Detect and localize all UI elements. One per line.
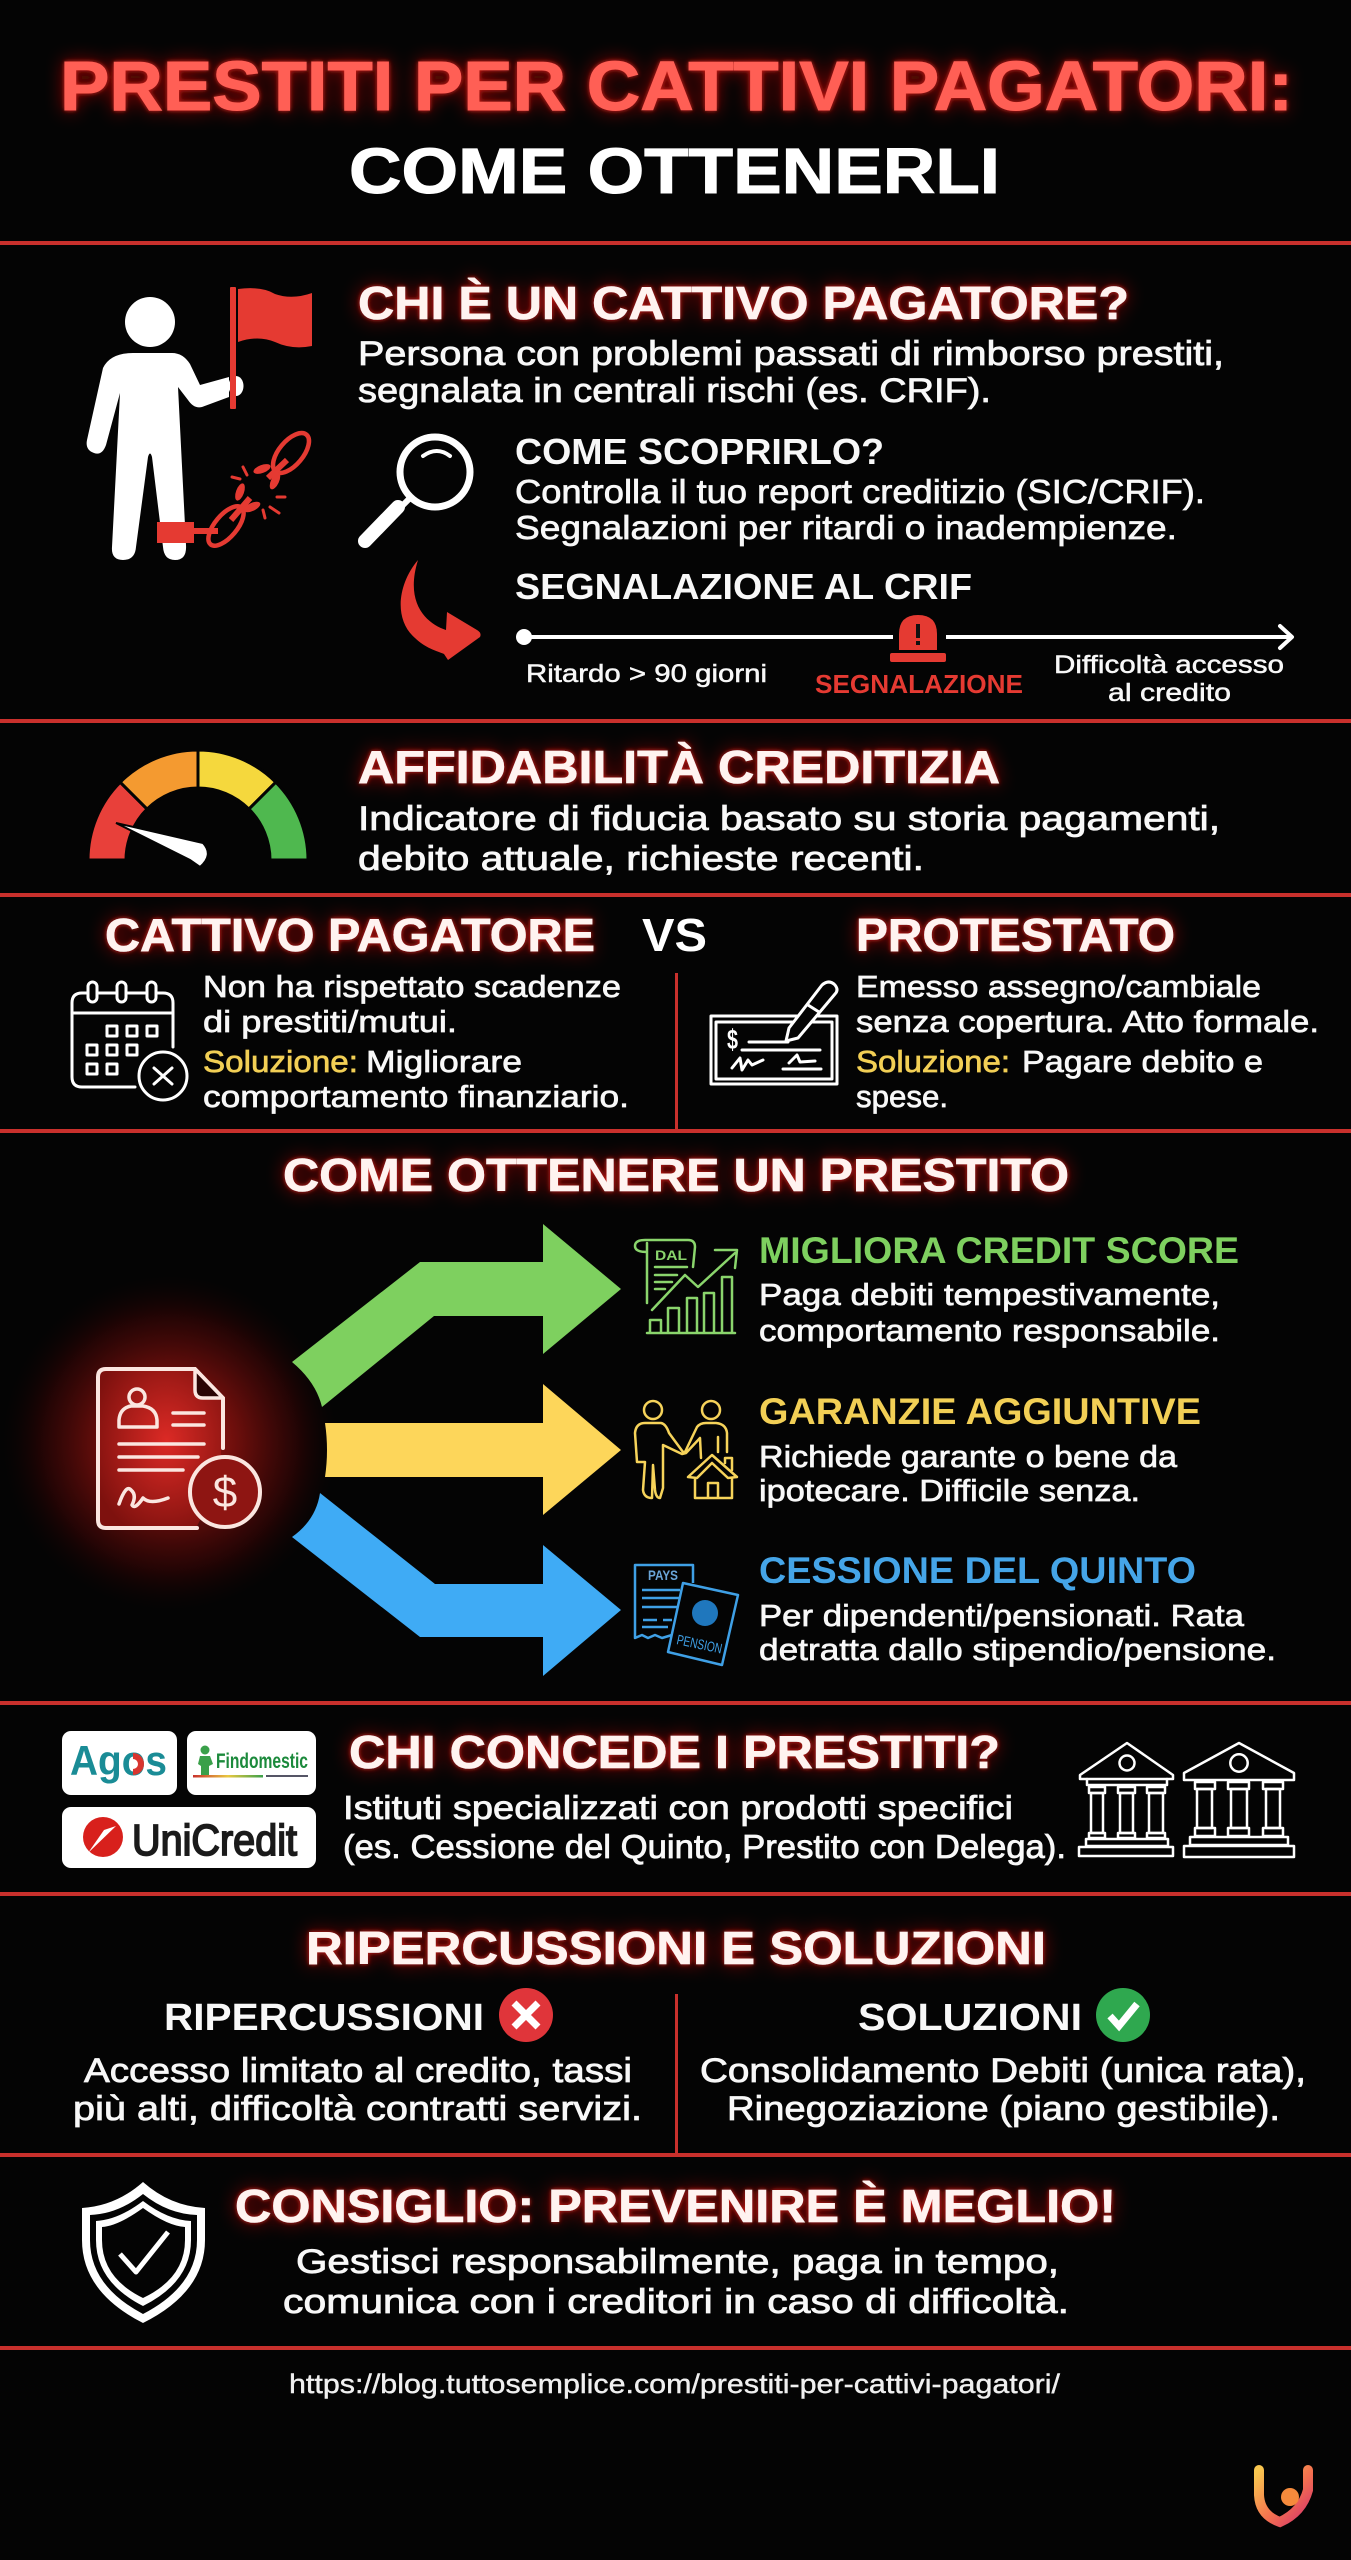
timeline label: difficoltà: al credito <box>1108 679 1231 707</box>
text block: Gestisci responsabilmente, paga in tempo, <box>296 2243 1059 2281</box>
text block: soluzioni: Consolidamento Debiti (unica rata), <box>700 2052 1306 2090</box>
logo: UniCredit: UniCredit <box>132 1816 297 1865</box>
text block: ripercussioni: più alti, difficoltà contratti servizi. <box>73 2090 642 2128</box>
text block: come scoprirlo: Segnalazioni per ritardi o inadempienze. <box>515 509 1177 546</box>
icon: pay slip and pension book: PENSION <box>675 1631 724 1656</box>
icon: shield with check <box>82 2182 205 2323</box>
column divider <box>675 973 678 1131</box>
text block: migliora credit score: Paga debiti tempestivamente, <box>759 1277 1220 1312</box>
logo: Agos: Agos <box>70 1737 167 1784</box>
text block: debito attuale, richieste recenti. <box>358 840 924 878</box>
text block: migliora credit score: MIGLIORA CREDIT SCORE <box>759 1230 1239 1271</box>
text block: cattivo pagatore: comportamento finanziario. <box>203 1079 629 1114</box>
text block: garanzie aggiuntive <box>759 1391 1201 1508</box>
icon: cheque and pen: $ <box>727 1024 738 1055</box>
arrow: curved red <box>401 560 481 660</box>
heading: CONSIGLIO: PREVENIRE È MEGLIO! <box>235 2180 1116 2232</box>
text block: soluzioni <box>700 2052 1306 2128</box>
text block: definition: Persona con problemi passati di rimborso prestiti, <box>358 335 1224 373</box>
icon: glowing loan document <box>2 1275 338 1611</box>
icon: person with red flag and broken chain <box>87 287 316 560</box>
text block <box>343 1789 1066 1865</box>
title <box>60 47 1293 207</box>
panel: chi è un cattivo pagatore <box>87 277 1292 707</box>
text block: come scoprirlo: COME SCOPRIRLO? <box>515 431 884 472</box>
heading: RIPERCUSSIONI E SOLUZIONI <box>306 1922 1046 1974</box>
text block: garanzie aggiuntive: ipotecare. Difficile senza. <box>759 1473 1140 1508</box>
column divider <box>675 1994 678 2155</box>
text block: cattivo pagatore: Soluzione: <box>203 1044 358 1079</box>
text block: cattivo pagatore <box>203 969 629 1114</box>
icon: glowing loan document: $ <box>213 1468 237 1517</box>
text block: come scoprirlo: Controlla il tuo report creditizio (SIC/CRIF). <box>515 473 1205 510</box>
panel: affidabilità creditizia <box>88 741 1220 878</box>
heading: COME OTTENERE UN PRESTITO <box>283 1149 1069 1201</box>
text block: protestato: Pagare debito e <box>1022 1044 1263 1079</box>
text block: Indicatore di fiducia basato su storia pagamenti, <box>358 800 1220 838</box>
timeline label: difficoltà: Difficoltà accesso <box>1054 651 1284 679</box>
text block: definition: segnalata in centrali rischi (es. CRIF). <box>358 372 991 410</box>
arrow: green <box>292 1224 621 1407</box>
text block: protestato <box>856 969 1319 1114</box>
text block: ripercussioni <box>73 2052 642 2128</box>
text block: cattivo pagatore: di prestiti/mutui. <box>203 1004 457 1039</box>
text block: cessione del quinto: detratta dallo stipendio/pensione. <box>759 1632 1276 1667</box>
text block: (es. Cessione del Quinto, Prestito con Delega). <box>343 1828 1066 1865</box>
text block: comunica con i creditori in caso di difficoltà. <box>283 2283 1069 2321</box>
title: PRESTITI PER CATTIVI PAGATORI: <box>60 47 1293 125</box>
icon: credit score chart: DAL <box>655 1247 687 1263</box>
heading: cattivo pagatore: CATTIVO PAGATORE <box>105 909 595 961</box>
icon: magnifying glass <box>365 437 470 541</box>
icon: pay slip and pension book <box>635 1565 738 1665</box>
text block: protestato: spese. <box>856 1079 948 1114</box>
text block: definition <box>358 335 1224 410</box>
logo: Agos <box>62 1731 177 1795</box>
heading: CHI È UN CATTIVO PAGATORE? <box>358 277 1129 329</box>
source url: https://blog.tuttosemplice.com/prestiti-per-cattivi-pagatori/ <box>289 2369 1061 2399</box>
icon: gauge <box>88 750 308 867</box>
text block: cattivo pagatore: Non ha rispettato scadenze <box>203 969 621 1004</box>
text block: cattivo pagatore: Migliorare <box>366 1044 522 1079</box>
title: COME OTTENERLI <box>349 135 1000 207</box>
timeline <box>516 615 1292 707</box>
heading: protestato: PROTESTATO <box>856 909 1175 961</box>
text block <box>358 800 1220 878</box>
logo: UniCredit <box>62 1807 316 1868</box>
icon: pay slip and pension book: PAYS <box>648 1567 678 1583</box>
logo: Findomestic <box>187 1731 316 1795</box>
text block: garanzie aggiuntive: GARANZIE AGGIUNTIVE <box>759 1391 1201 1432</box>
icon: bank buildings <box>1079 1743 1294 1857</box>
panel: consiglio <box>82 2180 1116 2323</box>
panel: ripercussioni e soluzioni <box>73 1922 1306 2155</box>
icon: calendar with cross <box>72 982 187 1100</box>
text block: migliora credit score: comportamento responsabile. <box>759 1313 1220 1348</box>
text block: cessione del quinto: CESSIONE DEL QUINTO <box>759 1550 1196 1591</box>
arrow: yellow <box>325 1384 621 1515</box>
logo: brand mark <box>1259 2470 1308 2522</box>
panel: chi concede i prestiti <box>62 1726 1294 1868</box>
text block <box>283 2243 1069 2321</box>
text block: come scoprirlo <box>515 431 1205 546</box>
icon: alarm siren <box>890 615 946 662</box>
column heading: soluzioni: SOLUZIONI <box>858 1997 1082 2039</box>
icon: credit score chart <box>635 1240 737 1333</box>
heading: segnalazione al crif: SEGNALAZIONE AL CRIF <box>515 566 972 607</box>
arrow: blue <box>292 1493 621 1676</box>
text block: cessione del quinto: Per dipendenti/pensionati. Rata <box>759 1598 1245 1633</box>
timeline label: ritardo: Ritardo > 90 giorni <box>526 660 767 688</box>
text block: protestato: Soluzione: <box>856 1044 1010 1079</box>
text block: protestato: Emesso assegno/cambiale <box>856 969 1261 1004</box>
icon: cheque and pen <box>711 982 837 1084</box>
text block: soluzioni: Rinegoziazione (piano gestibile). <box>727 2090 1280 2128</box>
text block: Istituti specializzati con prodotti specifici <box>343 1789 1013 1826</box>
heading: AFFIDABILITÀ CREDITIZIA <box>358 741 1000 793</box>
text block: protestato: senza copertura. Atto formale. <box>856 1004 1319 1039</box>
icon: green check <box>1096 1988 1150 2042</box>
icon: red cross <box>499 1988 553 2042</box>
text block: ripercussioni: Accesso limitato al credito, tassi <box>84 2052 632 2090</box>
timeline label: segnalazione: SEGNALAZIONE <box>815 669 1023 699</box>
heading: vs: VS <box>642 909 707 961</box>
column heading: ripercussioni: RIPERCUSSIONI <box>164 1997 484 2039</box>
logo: Findomestic: Findomestic <box>216 1750 308 1773</box>
panel: come ottenere un prestito <box>2 1149 1276 1676</box>
icon: handshake and house <box>635 1401 737 1498</box>
text block: cessione del quinto <box>759 1550 1276 1667</box>
heading: CHI CONCEDE I PRESTITI? <box>349 1726 1000 1778</box>
text block: migliora credit score <box>759 1230 1239 1348</box>
timeline label: difficoltà <box>1054 651 1284 707</box>
panel: cattivo pagatore vs protestato <box>72 909 1319 1131</box>
text block: garanzie aggiuntive: Richiede garante o bene da <box>759 1439 1178 1474</box>
